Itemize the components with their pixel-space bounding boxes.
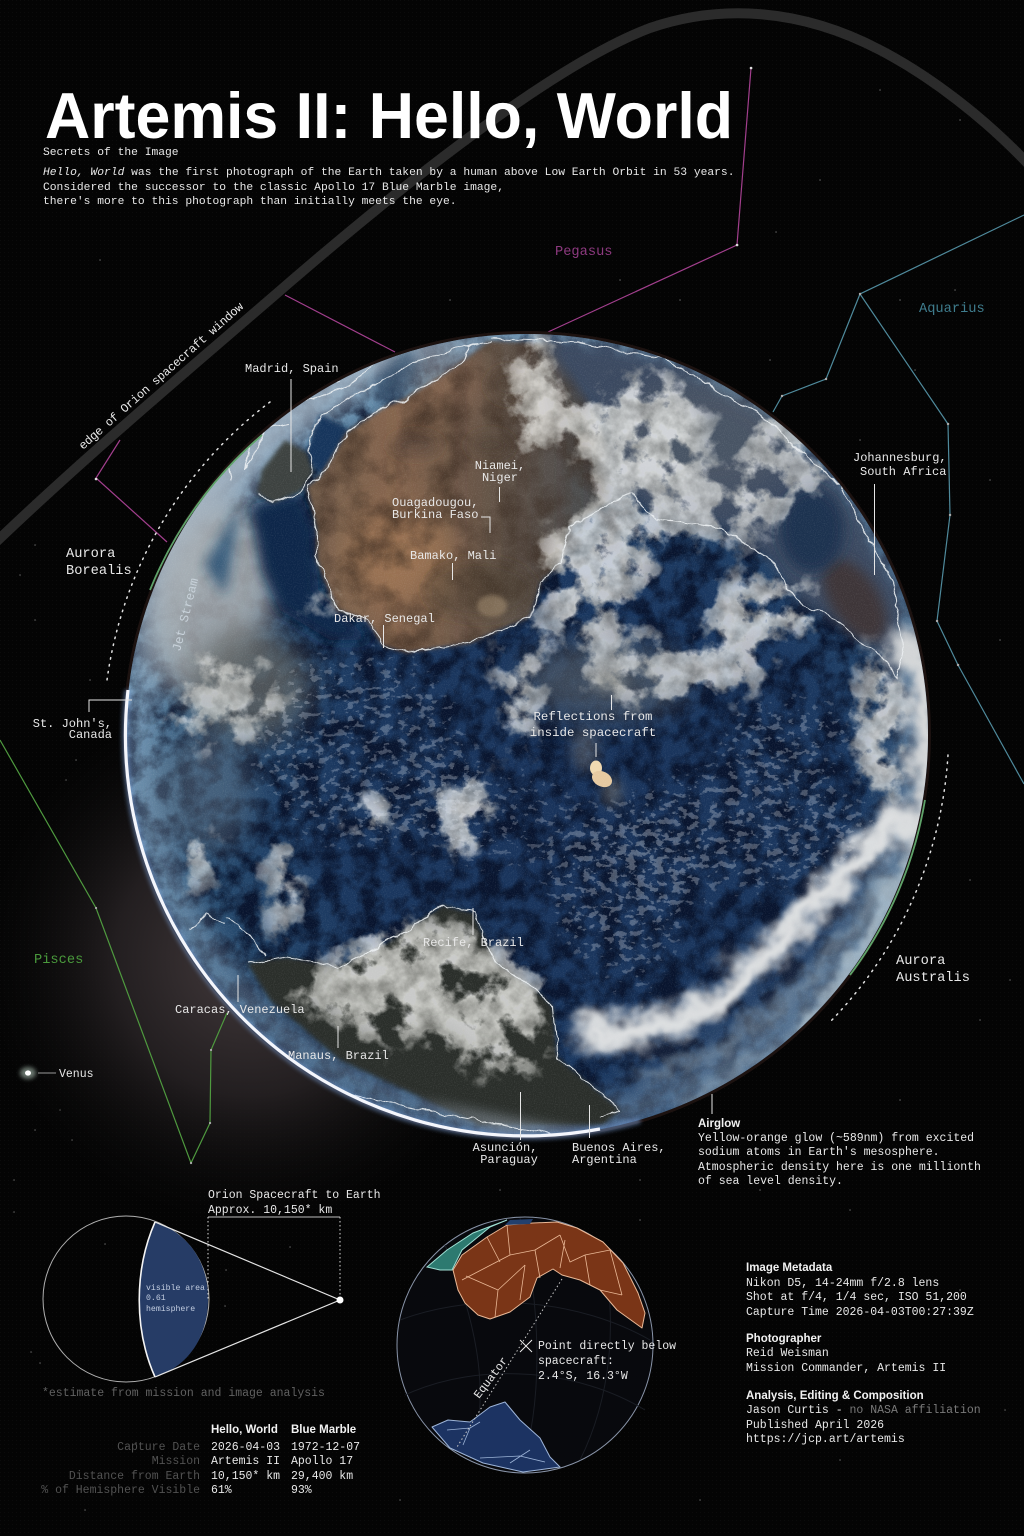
South America: [432, 1402, 560, 1472]
ocean: [120, 330, 935, 1140]
subtitle: Secrets of the Image: [43, 147, 179, 159]
callout: Johannesburg: South Africa: [860, 465, 946, 479]
mini globe map: [397, 1217, 676, 1473]
callout: Buenos Aires: Argentina: [572, 1153, 637, 1167]
green aurora limb: [150, 435, 925, 975]
Venus: [20, 1067, 94, 1081]
image metadata: Capture Time 2026-04-03T00:27:39Z: [746, 1306, 974, 1319]
Hello, World values: Artemis II: [211, 1455, 280, 1468]
callout: Buenos Aires: [572, 1105, 666, 1167]
dotted arc: Aurora Borealis: [107, 402, 270, 680]
callout: St. John's: [33, 700, 132, 742]
callout: Asuncion: [473, 1092, 538, 1167]
callout: Johannesburg: [853, 451, 947, 575]
distance bracket: [208, 1216, 340, 1218]
callout: St. John's: Canada: [69, 728, 112, 742]
Blue Marble values: 93%: [291, 1484, 312, 1497]
Earth photograph: [120, 325, 935, 1140]
photographer: [746, 1333, 946, 1375]
callout: Asuncion: Asunción,: [473, 1141, 537, 1155]
callout: Airglow: sodium atoms in Earth's mesosphere.: [698, 1146, 940, 1159]
sub-spacecraft cross: [520, 1340, 532, 1352]
image metadata: [746, 1262, 974, 1319]
callout: Bamako: [410, 549, 496, 580]
label: Jet Stream: Jet Stream: [170, 577, 202, 653]
window edge label: edge of Orion spacecraft window: [76, 300, 247, 453]
callout: Airglow: [698, 1094, 981, 1188]
outer rim: [123, 331, 931, 1139]
Europe: [427, 1220, 507, 1270]
Sahara texture: [307, 341, 620, 652]
Blue Marble values: 29,400 km: [291, 1470, 353, 1483]
diagram: visible hemisphere: [43, 1189, 381, 1382]
North polar sea: [505, 1219, 533, 1225]
callout: Madrid: Madrid, Spain: [245, 362, 339, 376]
Blue Marble values: Apollo 17: [291, 1455, 353, 1468]
visible cap: [139, 1222, 208, 1377]
column heads: Hello, World: [211, 1424, 278, 1436]
distance label: Approx. 10,150* km: [208, 1204, 332, 1217]
spacecraft reflections: [571, 676, 628, 806]
callout: Airglow: Atmospheric density here is one millionth: [698, 1161, 981, 1174]
callout: reflections from inside spacecraft: Reflections from: [534, 710, 652, 724]
constellation: Pegasus: [96, 68, 751, 542]
image grain: [120, 330, 935, 1140]
callout: Ouagadougou: Ouagadougou,: [392, 496, 478, 510]
callout: Airglow: Airglow: [698, 1118, 740, 1130]
frontal swirl cloud band: [590, 640, 925, 1100]
callout: Caracas: Caracas, Venezuela: [175, 1003, 305, 1017]
photographer: Photographer: [746, 1333, 822, 1345]
Hello, World values: 2026-04-03: [211, 1441, 280, 1454]
South America land: [247, 905, 620, 1125]
title: Artemis II: Hello, World: [45, 79, 733, 152]
callout: Recife: Recife, Brazil: [423, 936, 524, 950]
label: Equator: Equator: [472, 1355, 511, 1401]
puffy cloud masses: [155, 325, 914, 1083]
Iberia and Europe land: [257, 440, 313, 503]
limb haze: [139, 347, 915, 1123]
callout: Aurora Borealis: Aurora: [66, 547, 115, 562]
callout: Airglow: Yellow-orange glow (~589nm) from excited: [698, 1132, 974, 1145]
warm Sahara centre: [342, 507, 458, 603]
callout: Niamei: Niger: [482, 471, 518, 485]
label: Aquarius: Aquarius: [919, 302, 985, 317]
callout: Airglow: of sea level density.: [698, 1175, 843, 1188]
dotted arc: Aurora Australis: [830, 755, 948, 1022]
cap chord: [139, 1222, 155, 1377]
label: sub-spacecraft point: 2.4°S, 16.3°W: [538, 1370, 628, 1383]
row labels: % of Hemisphere Visible: [41, 1484, 200, 1497]
column heads: Blue Marble: [291, 1424, 356, 1436]
Hello, World values: 10,150* km: [211, 1470, 280, 1483]
cap label: visible area: [146, 1284, 205, 1293]
callout: Ouagadougou: [392, 496, 490, 533]
callout: Bamako: Bamako, Mali: [410, 549, 496, 563]
constellation: Aquarius: [773, 215, 1024, 784]
tangent lines: [155, 1222, 340, 1377]
Sahel dust reflection: [477, 595, 507, 617]
spacecraft point: [336, 1296, 344, 1304]
cap label: 0.61: [146, 1294, 166, 1303]
dark Atlantic off Iberia: [250, 492, 370, 640]
callout: St. John's: St. John's,: [33, 717, 112, 731]
label: Pegasus: Pegasus: [555, 245, 612, 260]
image metadata: Image Metadata: [746, 1262, 833, 1274]
comparison table: [41, 1424, 360, 1497]
analysis credit: Analysis, Editing & Composition: [746, 1390, 924, 1402]
row labels: Capture Date: [117, 1441, 200, 1454]
callout: Asuncion: Paraguay: [480, 1153, 538, 1167]
Sahara dark patches: [388, 382, 520, 618]
analysis credit: [746, 1390, 981, 1446]
Mediterranean: [305, 415, 350, 475]
Africa: [453, 1222, 645, 1328]
callout: Aurora Australis: Aurora: [896, 954, 945, 969]
label: Venus: Venus: [59, 1068, 94, 1081]
Blue Marble values: 1972-12-07: [291, 1441, 360, 1454]
callout: Niamei: [475, 459, 525, 502]
callout: Ouagadougou: Burkina Faso: [392, 508, 478, 522]
analysis credit: Published April 2026: [746, 1419, 884, 1432]
Central and East Africa land: [540, 340, 903, 678]
light glow beyond lower-left limb: [0, 670, 520, 1230]
photographer: Reid Weisman: [746, 1347, 829, 1360]
analysis credit: https://jcp.art/artemis: [746, 1433, 905, 1446]
equator line: [457, 1279, 562, 1447]
row labels: Mission: [152, 1455, 200, 1468]
analysis credit: Jason Curtis - no NASA affiliation: [746, 1404, 981, 1417]
bright airglow limb: [125, 690, 640, 1136]
callout: Aurora Australis: Australis: [896, 971, 970, 986]
intro paragraph: there's more to this photograph than initially meets the eye.: [43, 196, 457, 208]
callout: Dakar: Dakar, Senegal: [334, 612, 435, 626]
intro paragraph: Hello, World was the first photograph of the Earth taken by a human above Low Earth Orbit in 53 years.: [43, 167, 734, 179]
fine ocean cloud streets: [240, 640, 890, 1020]
callout: Niamei: Niamei,: [475, 459, 525, 473]
callout: reflections from inside spacecraft: [530, 695, 656, 757]
Earth circle: [43, 1216, 209, 1382]
callout: Manaus: Manaus, Brazil: [288, 1049, 389, 1063]
callout: Buenos Aires: Buenos Aires,: [572, 1141, 666, 1155]
distance label: Orion Spacecraft to Earth: [208, 1189, 381, 1202]
grey haze over Gulf of Guinea: [520, 640, 690, 720]
cap label: hemisphere: [146, 1304, 195, 1314]
label: sub-spacecraft point: spacecraft:: [538, 1355, 614, 1368]
Hello, World values: 61%: [211, 1484, 232, 1497]
callout: reflections from inside spacecraft: inside spacecraft: [530, 726, 656, 740]
Sahara: [307, 341, 620, 652]
callout: Madrid: [245, 362, 339, 472]
callout: Caracas: [175, 975, 305, 1017]
callout: Aurora Borealis: Borealis: [66, 564, 132, 579]
graticule: [400, 1218, 650, 1472]
footnote: *estimate from mission and image analysis: [42, 1387, 325, 1400]
edge of Orion spacecraft window: [0, 13, 1024, 544]
continental outlines: [190, 338, 903, 1135]
callout: Dakar: [334, 612, 435, 648]
constellation: Pisces: [0, 740, 227, 1163]
grey cloud field off northwest Africa: [138, 492, 288, 712]
image metadata: Nikon D5, 14-24mm f/2.8 lens: [746, 1277, 939, 1290]
callout: Johannesburg: Johannesburg,: [853, 451, 947, 465]
globe disc: [397, 1217, 653, 1473]
photographer: Mission Commander, Artemis II: [746, 1362, 946, 1375]
callout: Manaus: [288, 1026, 389, 1063]
label: Pisces: Pisces: [34, 953, 83, 968]
callout: Recife: [423, 908, 524, 950]
intro paragraph: Considered the successor to the classic Apollo 17 Blue Marble image,: [43, 182, 504, 194]
row labels: Distance from Earth: [69, 1470, 200, 1483]
label: sub-spacecraft point: Point directly below: [538, 1340, 676, 1353]
image metadata: Shot at f/4, 1/4 sec, ISO 51,200: [746, 1291, 967, 1304]
upper-left polar haze: [130, 336, 502, 689]
